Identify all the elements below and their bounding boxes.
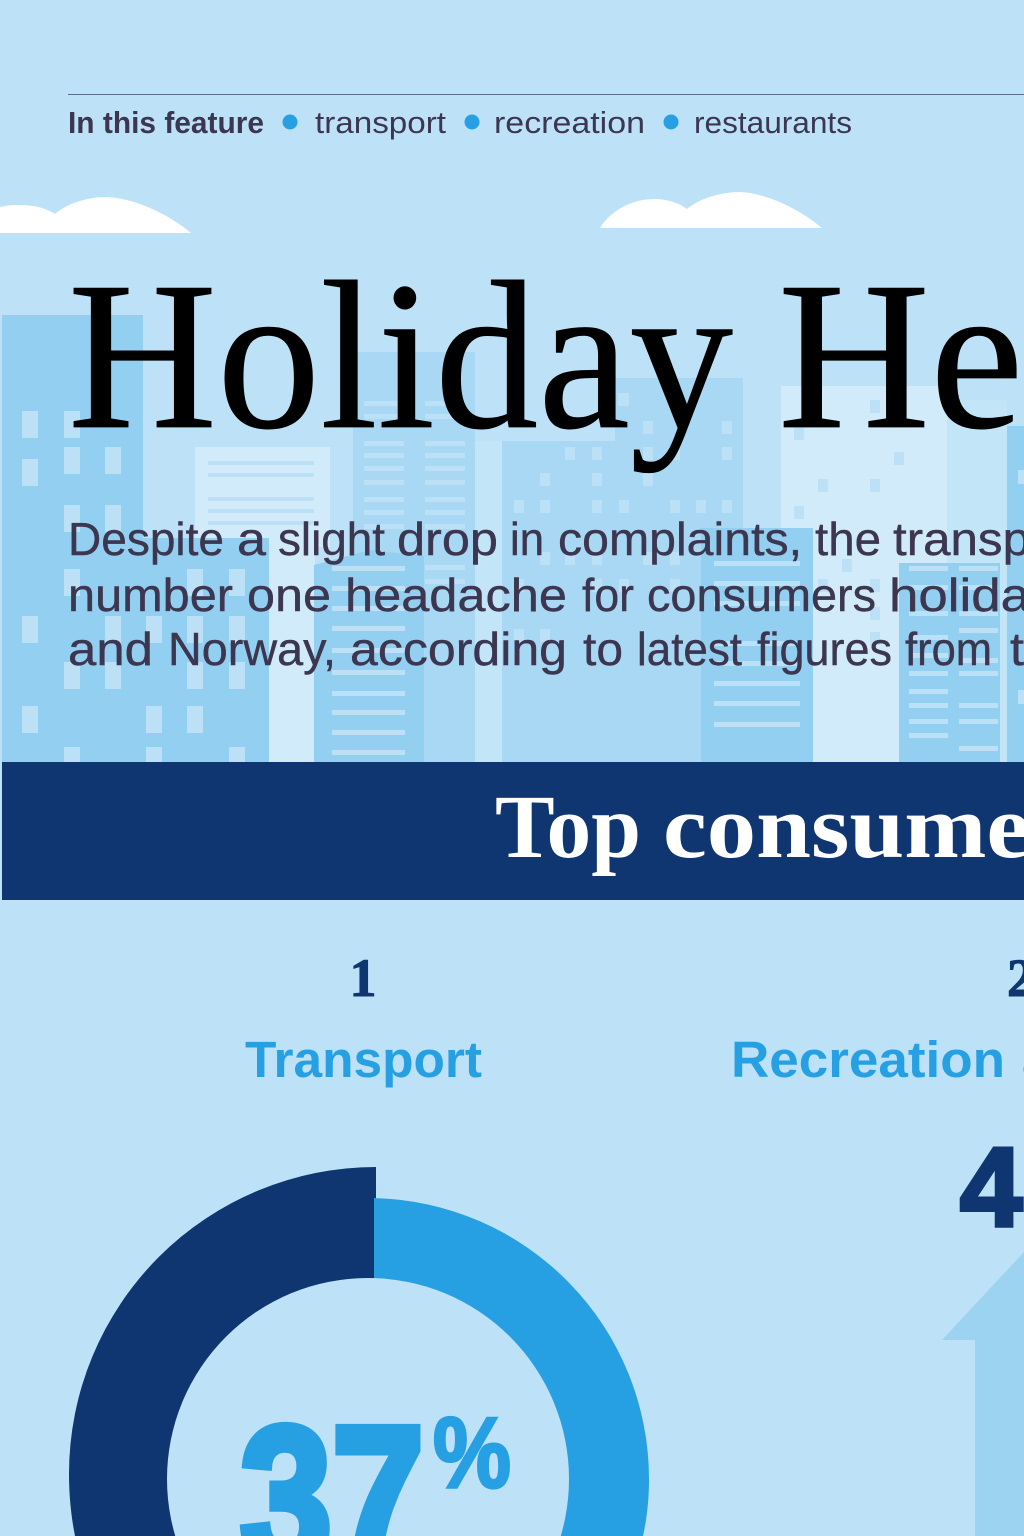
intro paragraph: holida [889, 569, 1024, 621]
banner heading: Top [495, 778, 641, 877]
icon: right cloud [600, 192, 822, 228]
feature strip: In this feature [68, 105, 264, 140]
category label: Recreation: Recreation [731, 1031, 1005, 1088]
feature strip: recreation [494, 105, 645, 140]
intro paragraph: and [68, 623, 153, 675]
header rule [68, 94, 1024, 95]
intro paragraph: according [350, 623, 567, 675]
intro paragraph: drop [397, 513, 498, 565]
intro paragraph: to [583, 623, 623, 675]
rank number 1: 1 [350, 948, 376, 1008]
intro paragraph: consumers [647, 569, 876, 621]
intro paragraph: transp [893, 513, 1024, 565]
intro paragraph: figures [757, 623, 892, 675]
intro paragraph: latest [637, 623, 742, 675]
intro paragraph: one [247, 569, 331, 621]
recreation value: 4 [960, 1125, 1022, 1250]
intro paragraph: number [68, 569, 233, 621]
intro paragraph: Norway, [168, 623, 336, 675]
intro paragraph: a [237, 513, 266, 565]
donut value: % [433, 1397, 511, 1509]
category label: Transport: Transport [245, 1031, 482, 1088]
intro paragraph: headache [345, 569, 567, 621]
feature strip [68, 105, 852, 140]
intro paragraph: from [905, 623, 992, 675]
banner heading [495, 778, 1024, 877]
intro paragraph: Despite [68, 513, 224, 565]
feature strip: restaurants [694, 105, 852, 140]
city skyline illustration [2, 315, 1024, 762]
icon: left cloud [0, 197, 191, 233]
section banner [2, 762, 1024, 900]
donut chart [69, 1167, 649, 1536]
intro paragraph [68, 513, 1024, 675]
intro paragraph: slight [278, 513, 385, 565]
intro paragraph: in [510, 513, 544, 565]
intro paragraph: for [582, 569, 634, 621]
intro paragraph: t [1010, 623, 1024, 675]
feature strip: transport [315, 105, 446, 140]
title: Holiday [68, 238, 733, 473]
intro paragraph: the [815, 513, 881, 565]
intro paragraph: complaints, [558, 513, 802, 565]
arrow [942, 1252, 1024, 1536]
